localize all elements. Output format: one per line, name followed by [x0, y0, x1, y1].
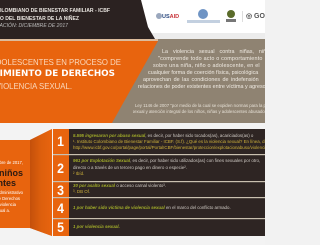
text 3: 30 por asalto sexual o acceso carnal violento³. [73, 183, 166, 188]
main title [0, 58, 121, 91]
row 1 [57, 133, 265, 150]
row 3 [57, 182, 166, 198]
text 2 [73, 158, 260, 176]
text 2: directo o a través de un tercero pago en dinero o especie². [73, 164, 187, 170]
law note [133, 103, 265, 114]
number 5: 5 [57, 219, 64, 235]
logo: shield [226, 10, 236, 22]
text 5: 1 por violencia sexual. [73, 224, 120, 229]
logo: USAID: USAID [162, 14, 179, 20]
definition text: cualquier forma de coerción física, psicológica [148, 70, 258, 76]
number 1: 1 [57, 133, 64, 149]
logo: USAID [156, 13, 179, 20]
definition text: sobre una niña, niño o adolescente, en el [153, 63, 260, 69]
text 3 [73, 183, 166, 194]
row 5 [57, 219, 120, 235]
number 2: 2 [57, 160, 64, 176]
definition text: aprovechan de las condiciones de indefensión [143, 77, 259, 83]
text 1 [73, 133, 265, 150]
text 3: ³. DB Of. [73, 189, 90, 194]
logos [156, 9, 265, 23]
left panel text: violencia [0, 202, 16, 207]
left panel text [0, 160, 23, 213]
law note: sexual y atención integral de los niños, niñas y adolescentes abusados [133, 109, 265, 114]
definition text: "comprende todo acto o comportamiento [158, 56, 263, 62]
number 4: 4 [57, 200, 64, 216]
logo: GOV [242, 11, 269, 22]
text 2: ² Ibíd. [73, 171, 84, 176]
row 4 [57, 200, 231, 216]
text 2: 961 por Explotación Sexual, es decir, por haber sido utilizados(as) con fines sexuales por otro, [73, 158, 260, 163]
logo: IOM [187, 9, 220, 23]
definition text [138, 49, 265, 90]
definition text: relaciones de poder existentes entre víctima y agresor [138, 84, 265, 90]
text 1: 5.595 ingresaron por abuso sexual, es decir, por haber sido tocados(as), acariciados(as) o [73, 133, 253, 138]
number 3: 3 [57, 182, 64, 198]
row 2 [57, 158, 260, 176]
header institution text [0, 8, 110, 29]
text 4: 1 por haber sido víctima de violencia sexual en el marco del conflicto armado. [73, 205, 231, 210]
